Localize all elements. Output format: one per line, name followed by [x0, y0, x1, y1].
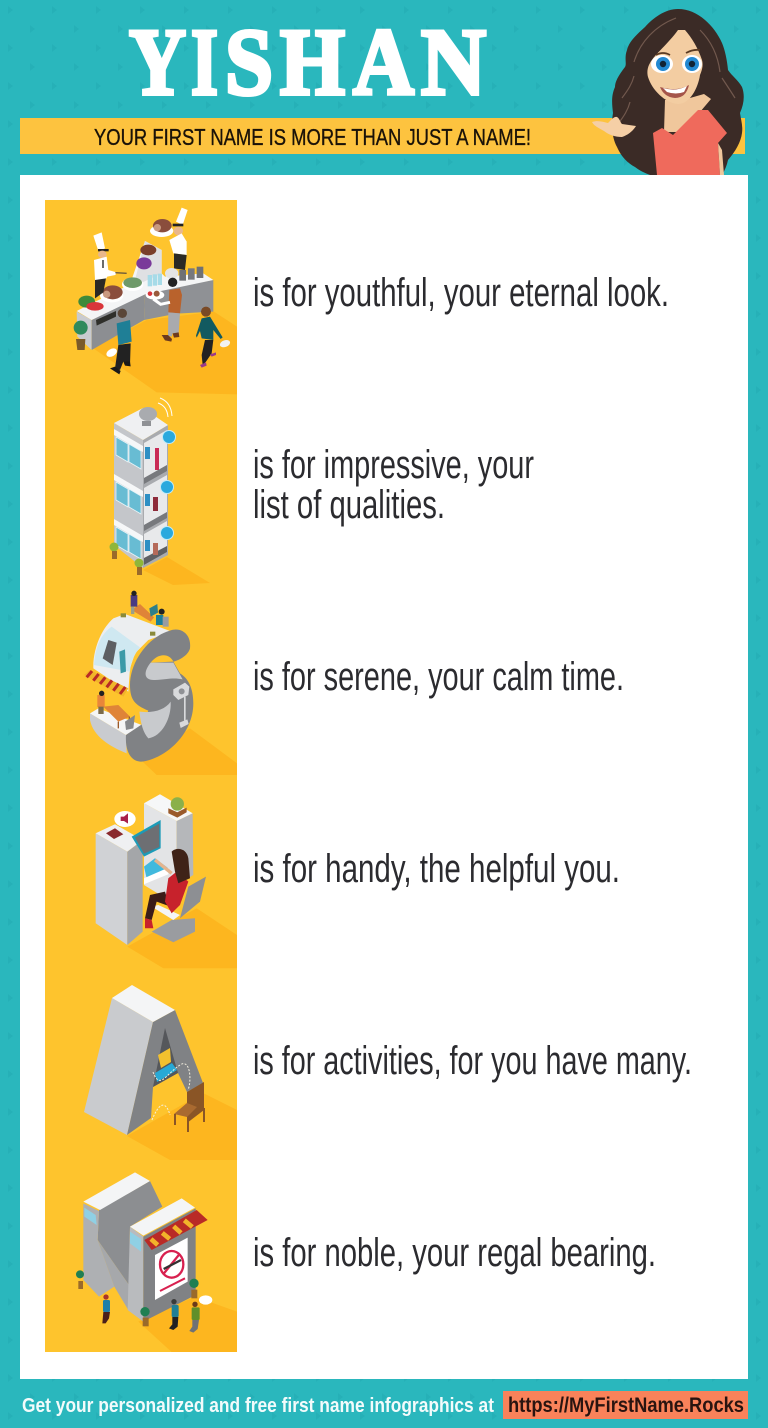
desk with workers on top — [121, 591, 169, 636]
text: I lines — [253, 443, 534, 527]
floors with workers — [144, 430, 167, 565]
mounted box — [173, 683, 189, 728]
status bubbles — [160, 430, 176, 540]
heading: name title: H — [280, 9, 345, 115]
footer: call to action: Get your personalized and free first name infographics at — [22, 1395, 494, 1417]
S front face — [126, 630, 193, 762]
icon: letter Y buffet counter — [74, 208, 237, 394]
banner: tagline — [20, 118, 745, 154]
no smoking sign — [155, 1238, 188, 1300]
panel: yellow illustration strip — [45, 200, 237, 1352]
food on counter — [78, 219, 203, 311]
icon: letter S building — [84, 591, 237, 775]
striped awning — [144, 1210, 208, 1250]
icon: letter H desk — [96, 794, 237, 968]
windows — [116, 437, 141, 559]
text: I lines: is for impressive, your — [253, 443, 534, 487]
heading: name title — [129, 9, 486, 115]
plant — [168, 797, 187, 818]
satellite dish — [139, 398, 172, 426]
wooden chair — [174, 1082, 204, 1132]
panel: white content card — [20, 175, 748, 1379]
character: presenter woman — [592, 9, 744, 175]
lower ledge — [90, 713, 127, 753]
plant — [74, 321, 88, 350]
text: I lines: list of qualities. — [253, 483, 445, 527]
tablet — [106, 828, 123, 839]
text: H line: is for handy, the helpful you. — [253, 847, 620, 891]
icon: letter N shop — [76, 1172, 237, 1352]
dashed outline of person — [152, 1064, 190, 1120]
upper white body — [93, 614, 172, 692]
plants — [76, 1270, 199, 1326]
chef left — [93, 232, 127, 298]
chair — [152, 877, 206, 942]
text: S line: is for serene, your calm time. — [253, 655, 624, 699]
plants — [110, 542, 144, 575]
heading: name title: N — [421, 9, 486, 115]
customer woman in teal — [196, 307, 231, 368]
monitor — [132, 820, 168, 884]
woman seated — [145, 849, 190, 928]
icon: letter I office tower — [110, 398, 210, 585]
laptop screen and desk — [155, 1048, 177, 1082]
people — [102, 1294, 212, 1333]
heading: name title: Y — [129, 9, 186, 115]
heading: name title: S — [225, 9, 273, 115]
desk with worker below — [97, 691, 135, 730]
chef right — [169, 208, 188, 270]
banner: tagline: YOUR FIRST NAME IS MORE THAN JUST A NAME! — [94, 124, 531, 150]
customer in orange — [146, 268, 182, 342]
heading: name title: I — [191, 9, 218, 115]
customer man in teal — [105, 309, 132, 374]
speaker bubble — [114, 811, 136, 827]
icon: letter A structure — [84, 985, 237, 1160]
striped awning — [84, 670, 128, 697]
heading: name title: A — [353, 9, 414, 115]
